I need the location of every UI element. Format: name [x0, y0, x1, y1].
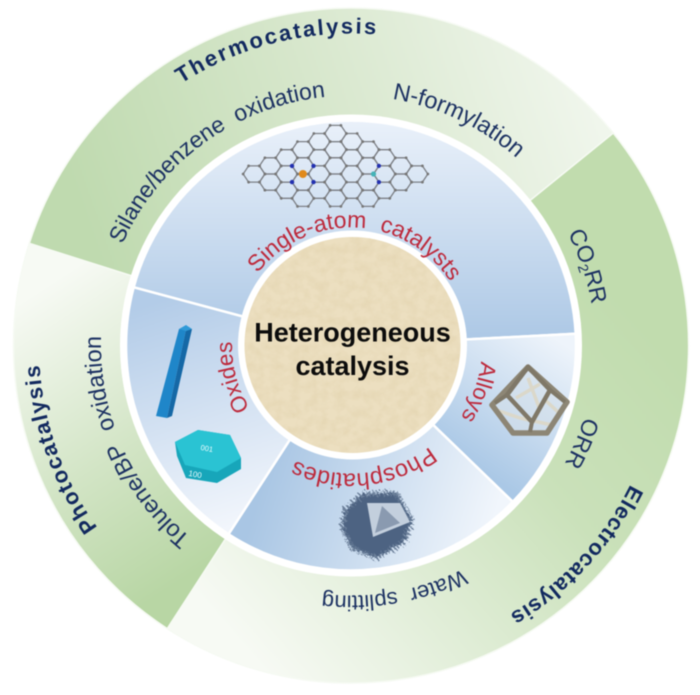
label: N-formylation: N-formylation: [394, 82, 523, 158]
heading: Thermocatalysis: Thermocatalysis: [173, 16, 376, 82]
panel: catalyst type wedges: [126, 121, 576, 570]
wedge: phosphatides: [228, 346, 513, 570]
wedge: alloys: [351, 334, 576, 502]
segment: electrocatalysis: [167, 133, 689, 683]
label: CO2RR: 2: [577, 264, 589, 274]
label: ORR: ORR: [564, 419, 598, 469]
icon: graphene lattice: [243, 125, 428, 206]
heading: Photocatalysis: Photocatalysis: [24, 366, 98, 536]
heading: Electrocatalysis: Electrocatalysis: [511, 485, 644, 623]
label: CO2RR: RR: [584, 269, 607, 304]
label: Single-atom catalysts: Single-atom catalysts: [248, 214, 460, 280]
icon: oxide hexagonal plate: 001: [200, 443, 214, 454]
label: Alloys: Alloys: [462, 360, 496, 422]
icon: phosphatide spiky polyhedron: [342, 493, 412, 558]
label: Oxides: Oxides: [217, 342, 248, 414]
label: Silane/benzene oxidation: Silane/benzene oxidation: [109, 84, 325, 243]
segment: thermocatalysis: [29, 8, 613, 276]
icon: oxide hexagonal plate: [175, 430, 241, 483]
label: Toluene/BP oxidation: Toluene/BP oxidation: [84, 336, 187, 550]
icon: oxide hexagonal plate: 100: [188, 469, 203, 480]
centre title: Heterogeneous: [254, 318, 451, 348]
icon: oxide nanorod: [156, 325, 192, 418]
label: Water splitting: Water splitting: [322, 570, 470, 612]
centre disc: sand texture: [238, 230, 467, 460]
centre title: catalysis: [295, 351, 410, 381]
white ring: catalyst wheel border: [120, 114, 582, 576]
wedge: oxides: [126, 287, 351, 534]
label: Phosphatides: Phosphatides: [292, 448, 438, 490]
label: CO2RR: CO: [570, 229, 595, 263]
segment: photocatalysis: [13, 243, 226, 629]
icon: alloy rhombic cage: [492, 367, 567, 433]
wedge: single-atom catalysts: [134, 121, 576, 345]
